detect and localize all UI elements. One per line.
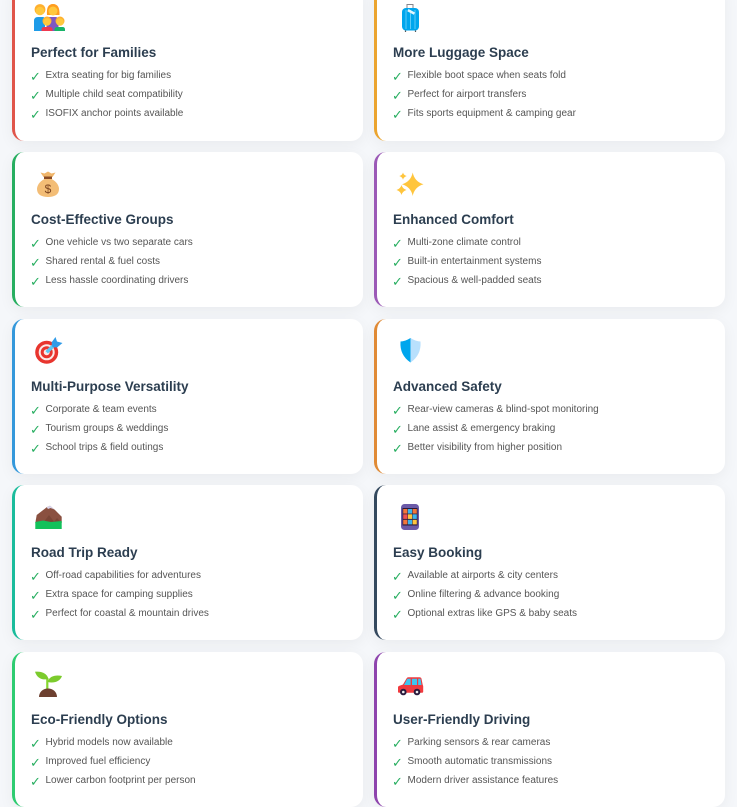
list item: ✓ (392, 404, 403, 418)
heading: Cost-Effective Groups (31, 212, 174, 227)
list item: ✓ (392, 588, 403, 604)
list item (30, 608, 209, 622)
panel: user-friendly driving (374, 652, 725, 807)
icon: family (34, 4, 65, 31)
panel: advanced safety (374, 319, 725, 474)
icon: luggage (402, 4, 419, 32)
icon: money bag: $ (45, 182, 52, 196)
heading: Enhanced Comfort (393, 212, 514, 227)
list item (30, 236, 193, 252)
list item: ISOFIX anchor points available (46, 108, 183, 119)
panel: eco-friendly options (12, 652, 363, 807)
list item (30, 70, 171, 84)
list item: Modern driver assistance features (408, 775, 558, 786)
list item: ✓ (392, 756, 403, 770)
list item: ✓ (30, 736, 41, 752)
list item: ✓ (30, 588, 41, 604)
heading: User-Friendly Driving (393, 712, 530, 727)
list item: ✓ (392, 608, 403, 622)
list item: ✓ (392, 442, 403, 456)
heading: Road Trip Ready (31, 545, 138, 560)
list item: ✓ (392, 570, 403, 584)
list item: Multi-zone climate control (408, 237, 521, 248)
list item: ✓ (30, 442, 41, 456)
list item: Better visibility from higher position (408, 442, 562, 453)
list item: Flexible boot space when seats fold (408, 70, 566, 81)
heading: More Luggage Space (393, 45, 529, 60)
list item: Lane assist & emergency braking (408, 423, 555, 434)
list item (392, 442, 562, 456)
list item: Lower carbon footprint per person (46, 775, 196, 786)
list item (392, 108, 576, 122)
heading: Multi-Purpose Versatility (31, 379, 189, 394)
list item (30, 774, 196, 790)
list item (30, 108, 183, 122)
list item (30, 570, 201, 584)
icon: target (35, 337, 62, 364)
panel: more luggage space (374, 0, 725, 141)
panel: road trip ready (12, 485, 363, 640)
list item: ✓ (30, 236, 41, 252)
list item: Hybrid models now available (46, 737, 173, 748)
list item: ✓ (392, 88, 403, 104)
list item: Perfect for coastal & mountain drives (46, 608, 209, 619)
list item (392, 274, 542, 290)
list item (30, 736, 173, 752)
list item: One vehicle vs two separate cars (46, 237, 193, 248)
panel: cost-effective groups (12, 152, 363, 307)
icon: car (398, 677, 424, 696)
list item: Multiple child seat compatibility (46, 89, 183, 100)
list item: ✓ (392, 108, 403, 122)
list item (392, 70, 566, 84)
list item: Fits sports equipment & camping gear (408, 108, 576, 119)
list item (392, 736, 550, 752)
list item: ✓ (30, 422, 41, 438)
list item (30, 588, 193, 604)
list item: Off-road capabilities for adventures (46, 570, 201, 581)
list item: ✓ (30, 274, 41, 290)
list item: ✓ (30, 570, 41, 584)
list item (30, 422, 168, 438)
list item: ✓ (30, 756, 41, 770)
list item (30, 256, 160, 270)
panel: multi-purpose versatility (12, 319, 363, 474)
list item: Improved fuel efficiency (46, 756, 150, 767)
icon: shield (400, 338, 420, 362)
heading: Eco-Friendly Options (31, 712, 168, 727)
list item: ✓ (392, 256, 403, 270)
list item (30, 404, 157, 418)
list item: Tourism groups & weddings (46, 423, 168, 434)
list item (392, 608, 577, 622)
panel: easy booking (374, 485, 725, 640)
list item: ✓ (30, 608, 41, 622)
list item: School trips & field outings (46, 442, 163, 453)
list item (392, 88, 526, 104)
heading: Advanced Safety (393, 379, 502, 394)
list item (392, 256, 542, 270)
list item: Perfect for airport transfers (408, 89, 526, 100)
icon: seedling (35, 672, 62, 697)
list item (392, 236, 521, 252)
list item (392, 774, 558, 790)
list item (392, 756, 552, 770)
list item: Available at airports & city centers (408, 570, 558, 581)
list item (30, 88, 183, 104)
icon: sparkles (396, 172, 424, 196)
list item: Corporate & team events (46, 404, 157, 415)
list item: ✓ (30, 256, 41, 270)
list item: ✓ (392, 70, 403, 84)
list item: Rear-view cameras & blind-spot monitoring (408, 404, 599, 415)
list item (392, 422, 555, 438)
list item (30, 274, 188, 290)
heading: Perfect for Families (31, 45, 156, 60)
list item: ✓ (30, 70, 41, 84)
list item: Less hassle coordinating drivers (46, 275, 188, 286)
list item (30, 442, 163, 456)
list item: ✓ (30, 774, 41, 790)
list item (392, 404, 599, 418)
list item: Extra space for camping supplies (46, 589, 193, 600)
heading: Easy Booking (393, 545, 482, 560)
list item (392, 588, 559, 604)
list item: ✓ (30, 108, 41, 122)
list item: ✓ (392, 736, 403, 752)
list item: Extra seating for big families (46, 70, 171, 81)
list item: Online filtering & advance booking (408, 589, 559, 600)
list item: ✓ (392, 422, 403, 438)
list item: Spacious & well-padded seats (408, 275, 541, 286)
list item: ✓ (392, 274, 403, 290)
list item: Optional extras like GPS & baby seats (408, 608, 577, 619)
list item: ✓ (392, 774, 403, 790)
panel: enhanced comfort (374, 152, 725, 307)
list item (392, 570, 558, 584)
list item: Shared rental & fuel costs (46, 256, 160, 267)
list item: ✓ (30, 88, 41, 104)
icon: money bag (37, 172, 59, 197)
list item: ✓ (30, 404, 41, 418)
icon: mountain (35, 506, 62, 529)
list item (30, 756, 150, 770)
list item: Built-in entertainment systems (408, 256, 541, 267)
list item: ✓ (392, 236, 403, 252)
list item: Smooth automatic transmissions (408, 756, 552, 767)
panel: perfect for families (12, 0, 363, 141)
list item: Parking sensors & rear cameras (408, 737, 550, 748)
icon: tablet app grid (401, 504, 419, 530)
